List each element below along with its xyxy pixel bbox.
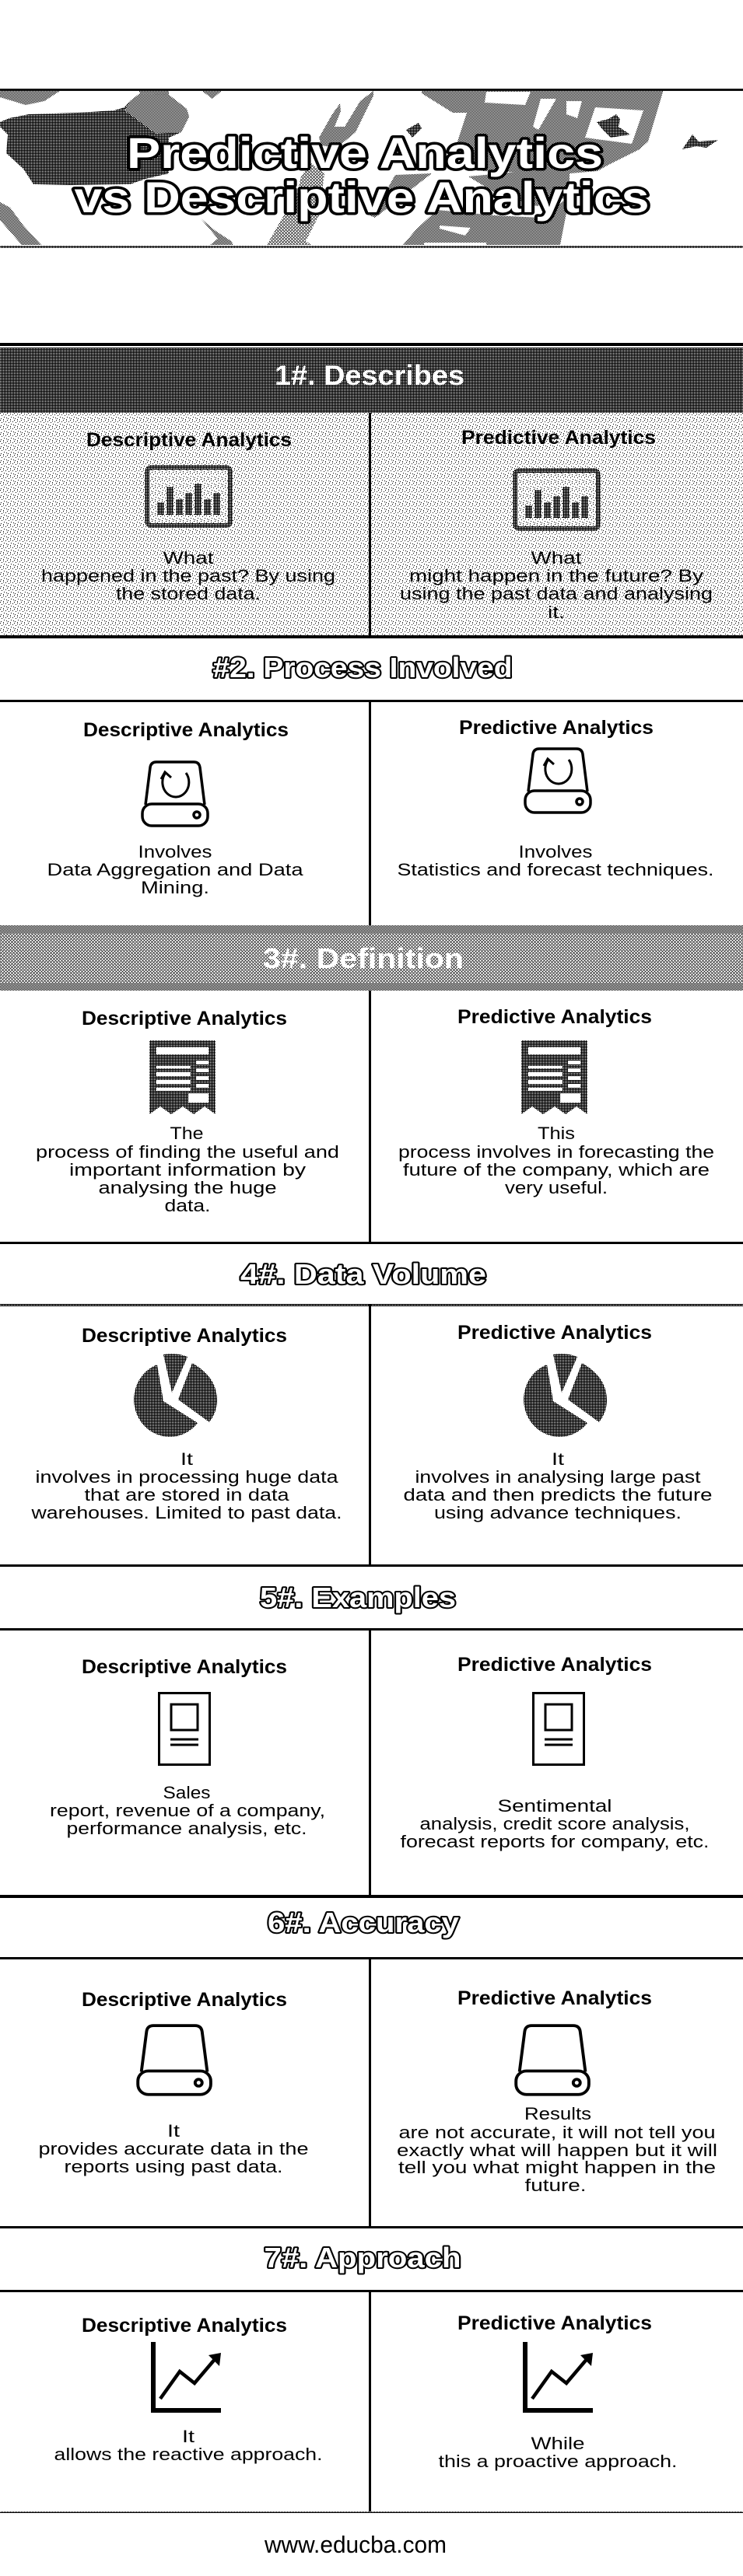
text: descriptive approach: It [182, 2427, 195, 2446]
section 4: data volume [0, 1258, 743, 1567]
text: descriptive definition: analysing the huge [98, 1178, 277, 1197]
icon: receipt right [521, 1040, 587, 1114]
text: descriptive describes: the stored data. [116, 584, 261, 603]
section header: data volume: 4#. Data Volume [240, 1258, 486, 1290]
text: descriptive describes: happened in the past? By using [41, 566, 335, 585]
text: predictive definition [398, 1124, 714, 1197]
text: predictive approach: While [531, 2434, 585, 2453]
text: descriptive definition [36, 1124, 339, 1215]
section header: examples: 5#. Examples [260, 1582, 456, 1613]
text: descriptive describes [41, 548, 335, 603]
section header: process involved: #2. Process Involved [213, 652, 512, 683]
text: descriptive process: Mining. [141, 878, 209, 897]
text: descriptive approach [54, 2427, 322, 2464]
icon: bar chart right [515, 470, 598, 529]
heading: predictive analytics: Predictive Analytics [457, 1006, 652, 1028]
text: predictive data volume [403, 1449, 713, 1522]
text: descriptive describes: What [163, 548, 213, 568]
text: descriptive accuracy: provides accurate data in the [39, 2139, 308, 2158]
text: descriptive process: Involves [138, 842, 212, 862]
table frame [0, 1957, 743, 2228]
text: predictive describes: What [531, 548, 582, 568]
text: descriptive data volume [30, 1449, 342, 1522]
text: descriptive process: Data Aggregation and Data [47, 860, 303, 879]
section 2: process involved [0, 652, 743, 925]
text: descriptive data volume: It [180, 1449, 193, 1469]
heading: predictive analytics: Predictive Analytics [457, 1987, 652, 2009]
icon: document right [534, 1693, 584, 1765]
text: descriptive accuracy: reports using past data. [64, 2157, 283, 2176]
text: predictive data volume: using advance techniques. [434, 1503, 682, 1522]
text: predictive describes: might happen in the future? By [409, 566, 703, 585]
text: descriptive definition: The [170, 1124, 204, 1143]
section 3: definition [0, 925, 743, 1244]
text: predictive process: Statistics and forecast techniques. [397, 860, 714, 879]
icon: document left [159, 1693, 210, 1765]
heading: predictive analytics: Predictive Analytics [457, 1654, 652, 1676]
section header: definition: 3#. Definition [263, 942, 464, 974]
text: predictive data volume: involves in analysing large past [415, 1467, 700, 1487]
text: predictive examples [400, 1796, 710, 1851]
text: predictive data volume: It [552, 1449, 564, 1469]
section header: 1#. Describes [0, 343, 743, 413]
table frame [0, 2290, 743, 2513]
text: descriptive examples [50, 1783, 325, 1838]
text: predictive accuracy: tell you what might happen in the [398, 2158, 716, 2177]
footer: website: www.educba.com [264, 2531, 447, 2558]
table frame [0, 991, 743, 1244]
text: predictive process: Involves [518, 842, 593, 862]
icon: bar chart left [147, 467, 230, 526]
table frame [0, 1628, 743, 1898]
heading: descriptive analytics: Descriptive Analytics [82, 1325, 287, 1347]
text: descriptive definition: data. [165, 1196, 210, 1215]
text: descriptive definition: important information by [69, 1160, 306, 1180]
heading: predictive analytics: Predictive Analytics [457, 2312, 652, 2334]
text: predictive examples: analysis, credit score analysis, [420, 1814, 689, 1833]
text: descriptive approach: allows the reactive approach. [54, 2445, 322, 2464]
text: descriptive data volume: warehouses. Limited to past data. [30, 1503, 342, 1522]
heading: descriptive analytics: Descriptive Analytics [82, 2315, 287, 2337]
text: descriptive accuracy [39, 2121, 308, 2176]
text: predictive accuracy: Results [524, 2104, 591, 2123]
text: descriptive data volume: that are stored in data [84, 1485, 289, 1505]
text: descriptive examples: performance analysis, etc. [67, 1819, 307, 1838]
heading: descriptive analytics: Descriptive Analytics [82, 1656, 287, 1678]
text: predictive examples: forecast reports for company, etc. [400, 1832, 710, 1851]
banner image [0, 89, 743, 248]
section header: 1#. Describes: 1#. Describes [275, 359, 464, 391]
section 5: examples [0, 1582, 743, 1898]
text: predictive definition: process involves in forecasting the [398, 1142, 714, 1162]
heading: descriptive analytics: Descriptive Analytics [83, 719, 289, 741]
heading: predictive analytics: Predictive Analytics [457, 1322, 652, 1344]
icon: trend chart left [153, 2342, 221, 2410]
icon: refresh drive left [142, 762, 208, 826]
text: descriptive accuracy: It [167, 2121, 180, 2141]
title: vs Descriptive Analytics [75, 173, 649, 222]
heading: descriptive analytics: Descriptive Analytics [82, 1008, 287, 1029]
text: descriptive examples: report, revenue of a company, [50, 1801, 325, 1820]
text: predictive accuracy: future. [524, 2176, 587, 2195]
heading: predictive analytics: Predictive Analytics [459, 717, 654, 739]
text: predictive data volume: data and then predicts the future [403, 1485, 713, 1505]
title: Predictive Analytics [127, 128, 603, 177]
icon: trend chart right [525, 2342, 593, 2410]
section 6: accuracy [0, 1907, 743, 2228]
title [75, 128, 649, 222]
text: predictive definition: This [538, 1124, 575, 1143]
icon: pie chart right [524, 1354, 607, 1437]
heading: descriptive analytics: Descriptive Analytics [82, 1989, 287, 2011]
section 7: approach [0, 2242, 743, 2513]
text: predictive definition: very useful. [505, 1178, 608, 1197]
heading: descriptive analytics: Descriptive Analytics [86, 429, 292, 451]
heading: predictive analytics: Predictive Analytics [461, 427, 656, 449]
icon: refresh drive right [525, 749, 591, 813]
text: predictive examples: Sentimental [498, 1796, 612, 1816]
icon: drive left [138, 2025, 211, 2095]
icon: receipt left [149, 1040, 216, 1114]
panel: describes comparison background [0, 413, 743, 638]
icon: drive right [516, 2025, 589, 2095]
text: predictive approach [439, 2434, 677, 2471]
text: predictive accuracy [397, 2104, 717, 2195]
table frame [0, 1304, 743, 1567]
text: descriptive process [47, 842, 303, 897]
text: predictive process [397, 842, 714, 879]
text: predictive definition: future of the company, which are [403, 1160, 710, 1180]
icon: pie chart left [134, 1354, 217, 1437]
text: predictive describes [400, 548, 713, 622]
section header: approach: 7#. Approach [265, 2242, 461, 2274]
text: descriptive definition: process of finding the useful and [36, 1142, 339, 1162]
text: predictive describes: using the past data and analysing [400, 584, 713, 603]
text: predictive accuracy: exactly what will happen but it will [397, 2141, 717, 2160]
section 1: describes [0, 343, 743, 638]
text: predictive approach: this a proactive approach. [439, 2452, 677, 2471]
section header: definition [0, 925, 743, 991]
text: descriptive data volume: involves in processing huge data [36, 1467, 338, 1487]
text: predictive accuracy: are not accurate, it will not tell you [398, 2123, 716, 2142]
text: predictive describes: it. [548, 603, 565, 622]
text: descriptive examples: Sales [163, 1783, 210, 1802]
table frame [0, 700, 743, 925]
section header: accuracy: 6#. Accuracy [268, 1907, 459, 1938]
